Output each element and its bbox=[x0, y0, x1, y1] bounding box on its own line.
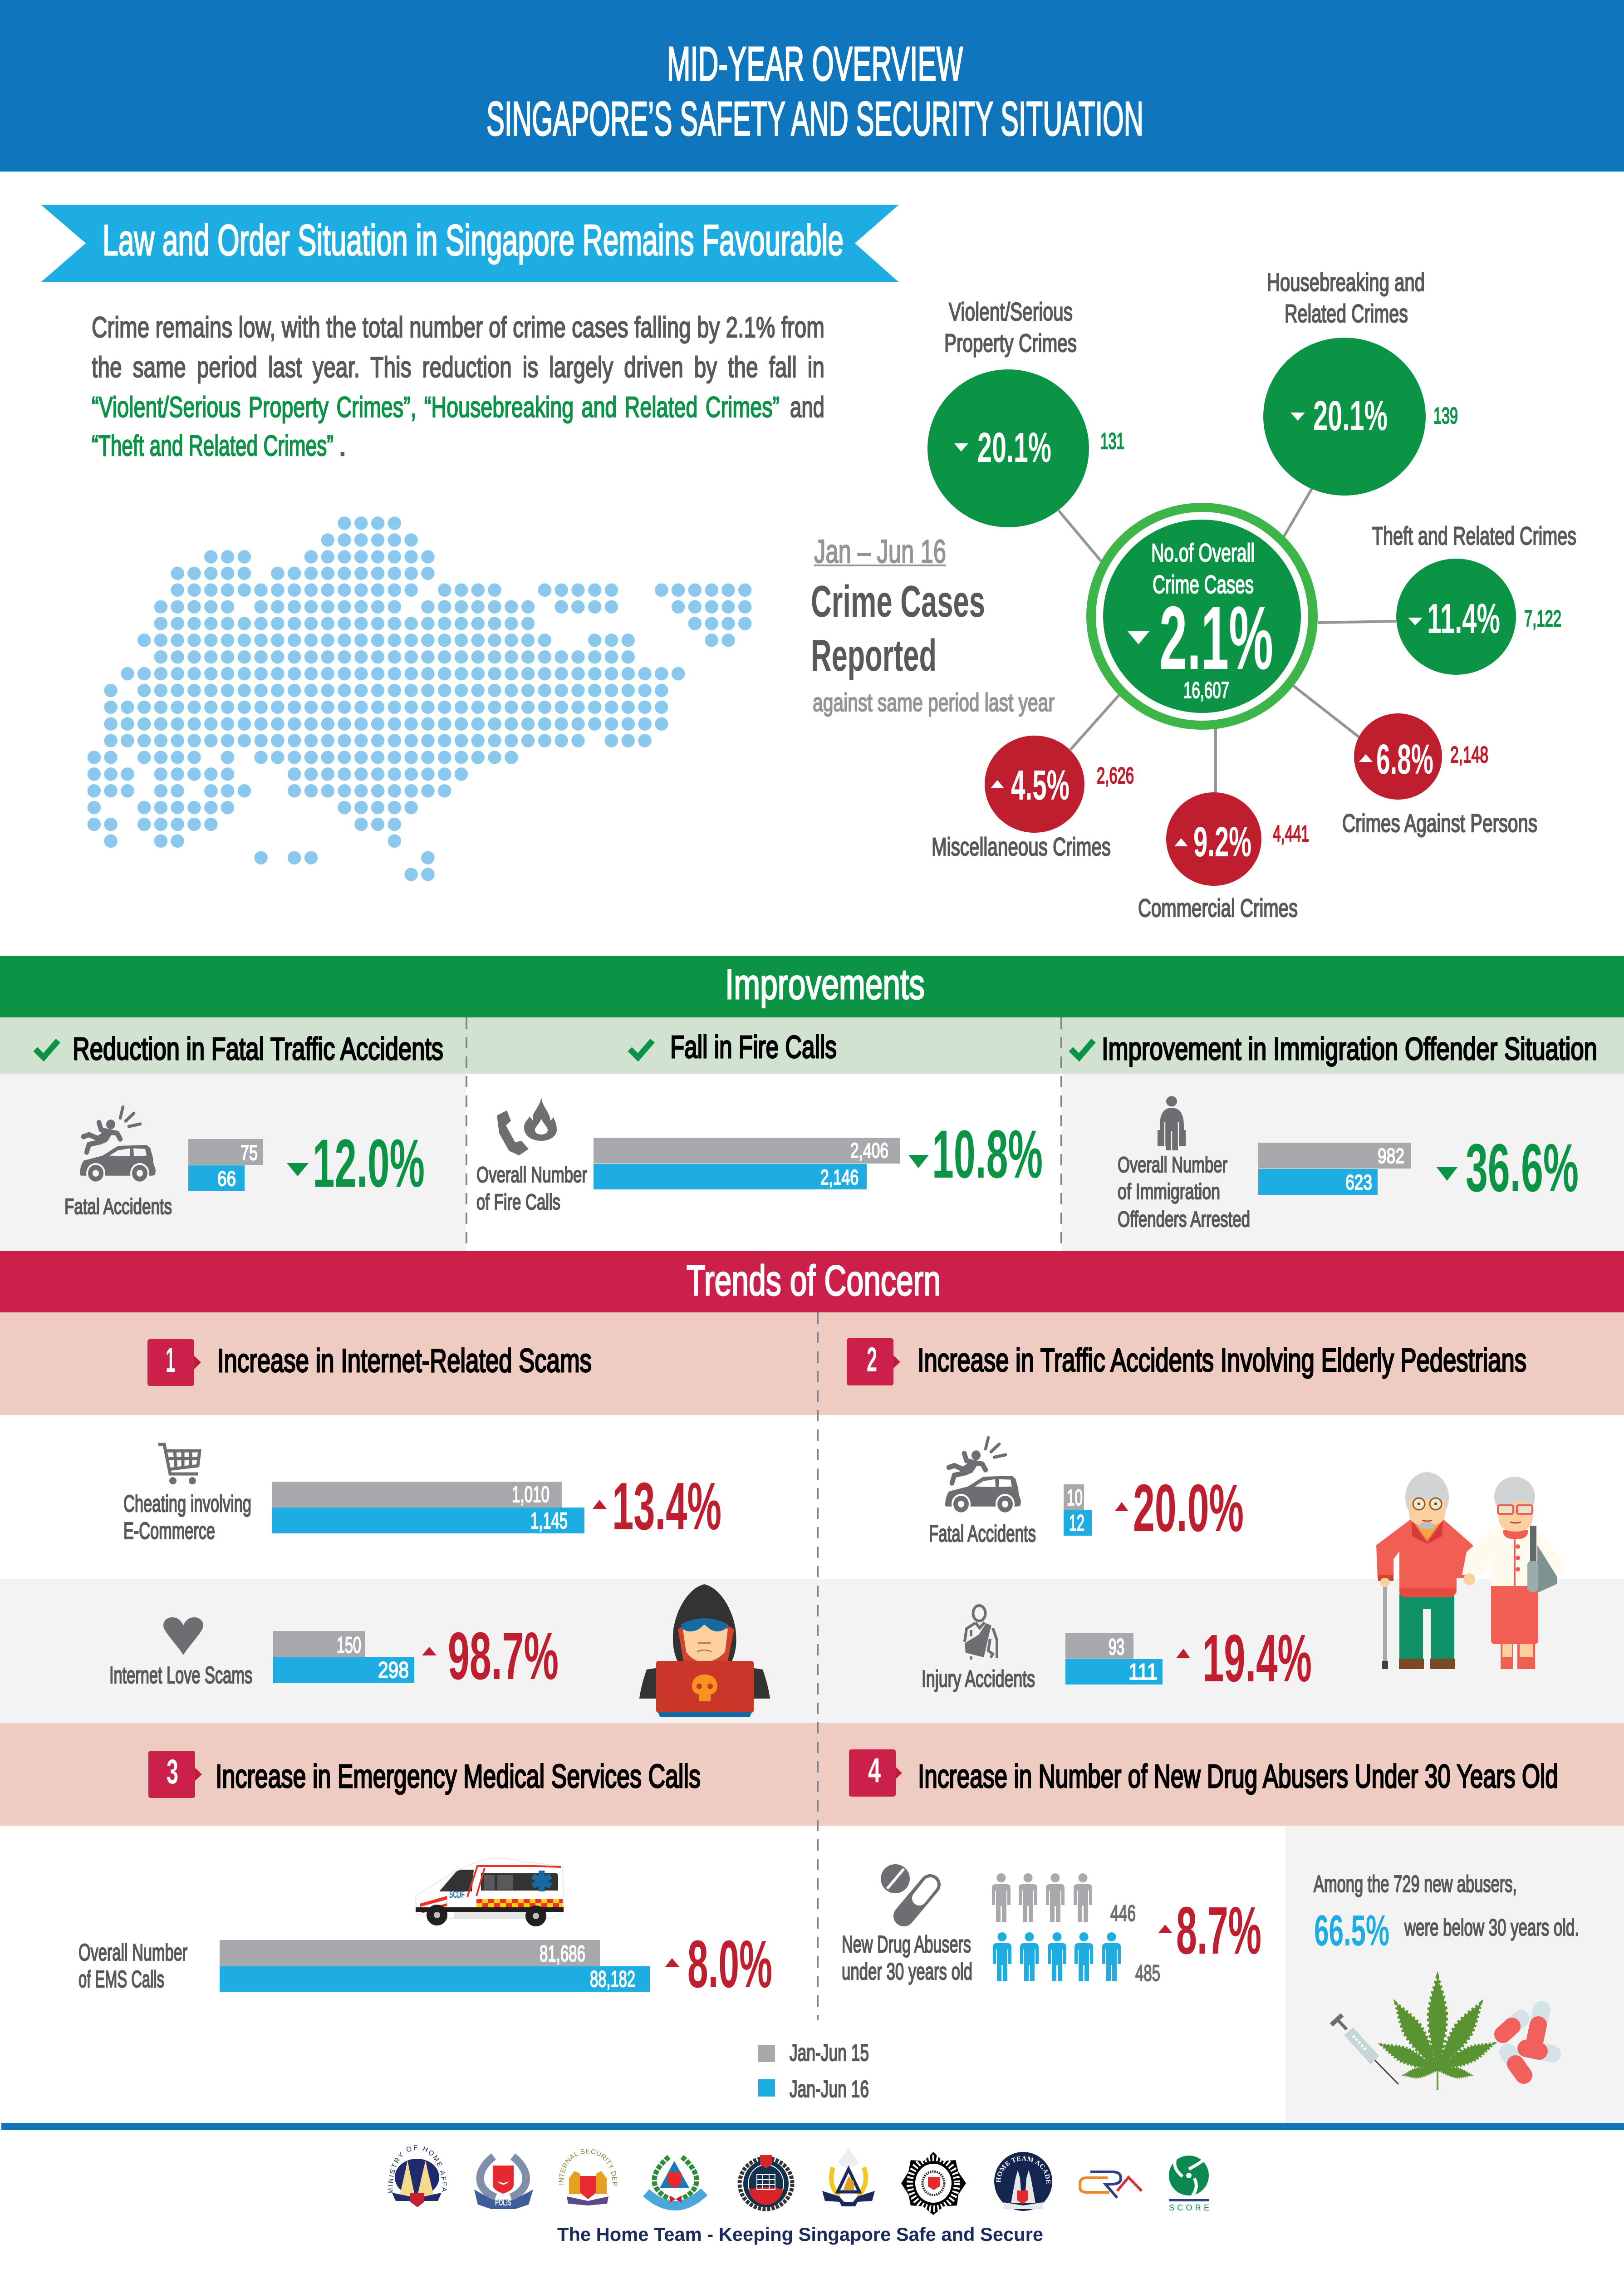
logo: Singapore Prison Service bbox=[822, 2148, 875, 2206]
bubble: commercial crimes: 4,441 bbox=[1273, 821, 1309, 846]
improvement: fatal traffic accidents: 12.0% bbox=[313, 1125, 425, 1201]
intro paragraph: . bbox=[339, 429, 347, 462]
improvement: fire calls: 10.8% bbox=[932, 1116, 1043, 1192]
improvement: immigration offenders: of Immigration bbox=[1118, 1180, 1220, 1204]
bubble: theft: 7,122 bbox=[1524, 606, 1561, 631]
trend 3: emergency medical calls: Increase in Emergency Medical Services Calls bbox=[216, 1758, 701, 1795]
title line 1: MID-YEAR OVERVIEW bbox=[667, 37, 963, 91]
improvement: immigration offenders: 982 bbox=[1378, 1144, 1404, 1168]
trend 1: internet-related scams: Increase in Internet-Related Scams bbox=[217, 1343, 592, 1379]
icon: heart bbox=[163, 1617, 203, 1655]
callout: share below 30: Among the 729 new abusers, bbox=[1314, 1871, 1517, 1897]
bubble: miscellaneous crimes: 2,626 bbox=[1097, 763, 1134, 788]
icon: car accident bbox=[945, 1438, 1021, 1510]
logo: SCORE: SCORE bbox=[1169, 2203, 1209, 2212]
trend 2: elderly pedestrian accidents bbox=[847, 1338, 1563, 1696]
trend 1: internet-related scams: 298 bbox=[378, 1657, 409, 1683]
icon: shopping cart bbox=[158, 1444, 200, 1484]
trend 3: emergency medical calls: 81,686 bbox=[540, 1941, 585, 1966]
bubble: overall crime cases: No.of Overall bbox=[1151, 538, 1255, 567]
ribbon heading: Law and Order Situation in Singapore Remains Favourable bbox=[103, 216, 844, 265]
bubble: miscellaneous crimes: Miscellaneous Crimes bbox=[932, 832, 1111, 861]
legend: Jan-Jun 15 bbox=[790, 2040, 869, 2066]
legend bbox=[758, 2040, 869, 2102]
logo: Central Narcotics Bureau bbox=[901, 2152, 966, 2215]
trend 4: young drug abusers: under 30 years old bbox=[842, 1959, 972, 1985]
connector lines bbox=[1059, 489, 1396, 792]
bubble: housebreaking bbox=[1263, 268, 1458, 496]
footer tagline: The Home Team - Keeping Singapore Safe and Secure bbox=[557, 2224, 1043, 2245]
logo: Singapore Police Force bbox=[474, 2156, 533, 2209]
improvement: fire calls bbox=[476, 1029, 1043, 1214]
trend 3: emergency medical calls bbox=[79, 1751, 772, 2002]
bubble: housebreaking: Related Crimes bbox=[1285, 299, 1408, 328]
trend 2: elderly pedestrian accidents: Injury Accidents bbox=[922, 1666, 1035, 1692]
trend 3: emergency medical calls: 8.0% bbox=[687, 1927, 772, 2002]
trend 1: internet-related scams: 150 bbox=[337, 1632, 361, 1658]
trend 3: emergency medical calls: 88,182 bbox=[590, 1966, 635, 1992]
trend 4: young drug abusers: 8.7% bbox=[1176, 1893, 1261, 1968]
improvement: fatal traffic accidents bbox=[35, 1031, 443, 1219]
bubble: miscellaneous crimes bbox=[932, 736, 1134, 861]
improvement: fatal traffic accidents: Fatal Accidents bbox=[64, 1195, 172, 1219]
footer logos bbox=[0, 0, 1209, 2215]
logo: CRA bbox=[1080, 2172, 1142, 2198]
callout: share below 30 bbox=[1314, 1871, 1579, 1955]
bubble: commercial crimes: Commercial Crimes bbox=[1138, 894, 1298, 922]
ribbon heading bbox=[41, 205, 899, 282]
bubble: violent/serious property crimes: 20.1% bbox=[977, 424, 1051, 471]
bubble: housebreaking: 139 bbox=[1433, 403, 1458, 428]
elderly man bbox=[1376, 1472, 1473, 1669]
improvement: fatal traffic accidents: Reduction in Fatal Traffic Accidents bbox=[73, 1031, 443, 1066]
trend 2: elderly pedestrian accidents: 12 bbox=[1069, 1510, 1084, 1536]
legend: Jan-Jun 16 bbox=[790, 2076, 869, 2102]
logo: Singapore Police Force: POLIS bbox=[495, 2198, 511, 2208]
trend 2: elderly pedestrian accidents: 111 bbox=[1128, 1659, 1158, 1685]
improvement: immigration offenders bbox=[1071, 1031, 1597, 1232]
logo: Singapore Civil Defence Force bbox=[646, 2157, 704, 2206]
improvement: immigration offenders: Overall Number bbox=[1118, 1153, 1227, 1177]
icon: pills bbox=[881, 1864, 930, 1916]
bubble: miscellaneous crimes: 4.5% bbox=[1011, 761, 1070, 809]
logo: Home Team Academy: HOME TEAM ACADEMY bbox=[0, 0, 1051, 2185]
illustration: ambulance: SCDF bbox=[449, 1889, 465, 1900]
icon: injured person with sling bbox=[965, 1606, 997, 1660]
header banner bbox=[0, 0, 1624, 172]
trend 2: elderly pedestrian accidents: Fatal Accidents bbox=[929, 1521, 1036, 1547]
trends of concern band bbox=[0, 1251, 1624, 1312]
trend 1: internet-related scams: E-Commerce bbox=[123, 1518, 215, 1544]
icon: car accident bbox=[80, 1107, 156, 1179]
illustration: hacker at laptop bbox=[639, 1584, 770, 1717]
badge 1: 1 bbox=[166, 1341, 175, 1380]
improvement: immigration offenders: 623 bbox=[1345, 1170, 1372, 1194]
logo: SCORE bbox=[1169, 2156, 1209, 2212]
improvement: fatal traffic accidents: 75 bbox=[240, 1141, 258, 1164]
bubble: overall crime cases: Crime Cases bbox=[1153, 570, 1254, 599]
bubble: violent/serious property crimes: Violent/Serious bbox=[949, 297, 1073, 326]
improvement: fire calls: of Fire Calls bbox=[476, 1190, 560, 1214]
improvements heading: Improvements bbox=[725, 960, 925, 1008]
bubble: crimes against persons: 2,148 bbox=[1450, 742, 1488, 767]
trend 3: emergency medical calls: Overall Number bbox=[79, 1940, 187, 1966]
trend 1: internet-related scams: 1,010 bbox=[512, 1482, 550, 1507]
trend 3: emergency medical calls: of EMS Calls bbox=[79, 1966, 164, 1993]
illustration: ambulance bbox=[416, 1858, 564, 1926]
trend 4: young drug abusers bbox=[842, 1749, 1579, 2090]
trend 4: young drug abusers: New Drug Abusers bbox=[842, 1931, 971, 1958]
logo: Ministry of Home Affairs: MINISTRY OF HOME AFFAIRS bbox=[0, 0, 448, 2194]
trend 1: internet-related scams bbox=[109, 1339, 770, 1717]
bubble: violent/serious property crimes: Property Crimes bbox=[944, 329, 1077, 357]
intro paragraph: the same period last year. This reduction is largely driven by the fall in bbox=[92, 351, 824, 383]
trend 1: internet-related scams: 13.4% bbox=[612, 1469, 721, 1544]
people: Jan-Jun 16 bbox=[993, 1932, 1121, 1981]
crime cases caption: Reported bbox=[811, 630, 937, 680]
callout: share below 30: 66.5% bbox=[1314, 1906, 1389, 1955]
illustration: elderly couple bbox=[1376, 1472, 1563, 1669]
badge 2 bbox=[847, 1338, 900, 1385]
intro paragraph: Crime remains low, with the total number of crime cases falling by 2.1% from bbox=[92, 311, 824, 344]
illustration: capsules bbox=[1503, 2009, 1552, 2075]
improvement: immigration offenders: Offenders Arrested bbox=[1118, 1208, 1250, 1232]
improvements section bbox=[0, 956, 1624, 1251]
bubble: crimes against persons bbox=[1342, 713, 1537, 837]
bubble: overall crime cases: 16,607 bbox=[1183, 678, 1229, 703]
bubble: housebreaking: Housebreaking and bbox=[1267, 268, 1425, 296]
trend 2: elderly pedestrian accidents: 10 bbox=[1067, 1485, 1083, 1510]
trend 2: elderly pedestrian accidents: 20.0% bbox=[1133, 1471, 1244, 1546]
intro paragraph: “Theft and Related Crimes” bbox=[92, 429, 334, 462]
bubble: violent/serious property crimes bbox=[927, 297, 1124, 527]
bubble: commercial crimes: 9.2% bbox=[1193, 818, 1251, 865]
bubble: crimes against persons: Crimes Against Persons bbox=[1342, 809, 1537, 837]
bubble: theft bbox=[1372, 521, 1576, 675]
trend 4: young drug abusers: 446 bbox=[1110, 1901, 1136, 1926]
intro paragraph bbox=[92, 311, 824, 462]
crime cases caption: Crime Cases bbox=[811, 576, 985, 626]
improvement: fire calls: 2,406 bbox=[850, 1139, 888, 1162]
logo: Internal Security Department: INTERNAL SECURITY DEPARTMENT bbox=[0, 0, 618, 2186]
illustration: cannabis leaf bbox=[1379, 1977, 1496, 2090]
logo: Immigration and Checkpoints Authority bbox=[740, 2155, 792, 2209]
improvement: fire calls: Fall in Fire Calls bbox=[670, 1029, 837, 1065]
crime cases caption: Jan – Jun 16 bbox=[814, 534, 946, 570]
improvement: fire calls: 2,146 bbox=[820, 1165, 859, 1189]
crime cases caption bbox=[811, 534, 1055, 717]
trend 1: internet-related scams: 1,145 bbox=[530, 1508, 568, 1533]
dot map of Singapore bbox=[94, 523, 746, 874]
badge 3 bbox=[148, 1751, 202, 1798]
improvement: fire calls: Overall Number bbox=[476, 1163, 587, 1187]
bubble: housebreaking: 20.1% bbox=[1313, 392, 1388, 439]
people: Jan-Jun 15 bbox=[992, 1873, 1092, 1922]
bubble: commercial crimes bbox=[1138, 792, 1309, 922]
badge 3: 3 bbox=[167, 1753, 178, 1791]
trend 2: elderly pedestrian accidents: 93 bbox=[1109, 1634, 1124, 1660]
trend 2: elderly pedestrian accidents: 19.4% bbox=[1202, 1621, 1312, 1696]
bubble: violent/serious property crimes: 131 bbox=[1100, 428, 1124, 454]
trend 4: young drug abusers: 485 bbox=[1135, 1960, 1160, 1986]
icon: phone and flame bbox=[497, 1097, 557, 1155]
section backgrounds bbox=[0, 1312, 1624, 2123]
title line 2: SINGAPORE’S SAFETY AND SECURITY SITUATION bbox=[486, 92, 1143, 146]
footer rule bbox=[1, 2123, 1624, 2130]
trend 1: internet-related scams: 98.7% bbox=[448, 1619, 559, 1694]
badge 4 bbox=[849, 1749, 902, 1797]
trend 1: internet-related scams: Cheating involving bbox=[123, 1491, 251, 1517]
intro paragraph: “Violent/Serious Property Crimes”, “Housebreaking and Related Crimes” bbox=[92, 391, 780, 423]
icon: offender with luggage bbox=[1158, 1096, 1186, 1150]
badge 1 bbox=[147, 1339, 201, 1386]
badge 2: 2 bbox=[867, 1341, 877, 1379]
crime cases caption: against same period last year bbox=[813, 688, 1055, 717]
bubble: crimes against persons: 6.8% bbox=[1376, 736, 1433, 783]
badge 4: 4 bbox=[868, 1751, 881, 1790]
bubble: overall crime cases: 2.1% bbox=[1159, 588, 1273, 688]
intro paragraph: and bbox=[790, 391, 824, 423]
bubble: theft: 11.4% bbox=[1427, 595, 1500, 642]
elderly woman bbox=[1462, 1477, 1563, 1669]
trends of concern band: Trends of Concern bbox=[687, 1257, 941, 1304]
cane bbox=[1382, 1583, 1388, 1669]
bubble: overall crime cases bbox=[1086, 503, 1318, 730]
illustration: syringe bbox=[1331, 2015, 1398, 2084]
improvement: fatal traffic accidents: 66 bbox=[217, 1167, 236, 1190]
trend 1: internet-related scams: Internet Love Scams bbox=[109, 1662, 252, 1689]
